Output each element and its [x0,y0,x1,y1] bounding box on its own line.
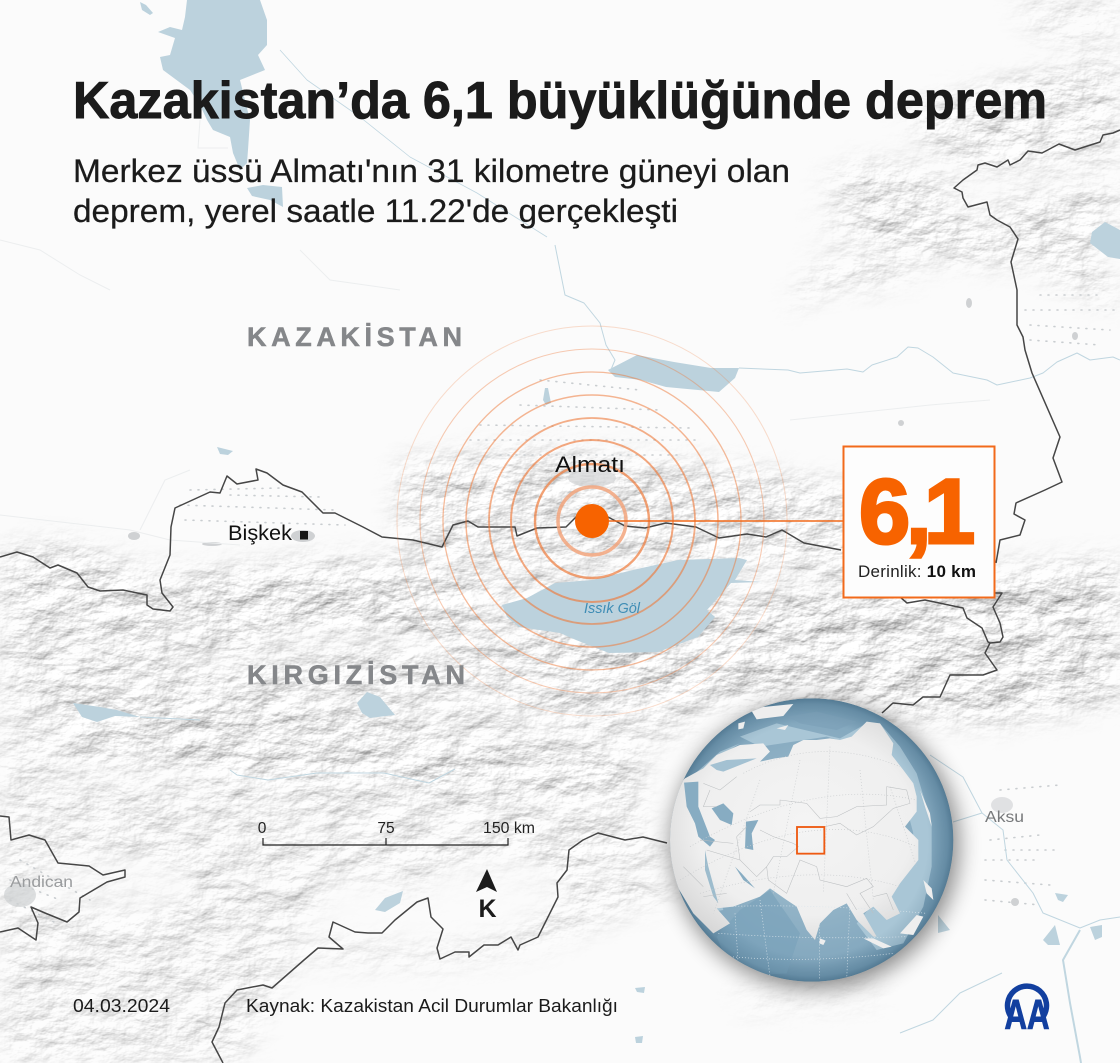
label: Issık Göl: Issık Göl [584,600,641,617]
islands [738,704,933,948]
border: Kazakhstan–China [954,130,1120,563]
border: Fergana [0,816,125,940]
scale bar: 150 km [483,820,535,837]
label: Bişkek: Bişkek [228,522,293,545]
label: Aksu: Aksu [985,809,1024,826]
north arrow [476,869,497,923]
leader line [592,520,843,522]
logo: AA [1004,986,1050,1038]
magnitude value: 6,1 [859,461,975,563]
graticule [680,747,917,913]
seismic rings [397,326,787,716]
label: Almatı: Almatı [555,452,625,477]
arctic shelf [680,723,932,950]
label: Andican: Andican [10,874,73,891]
scale bar [258,820,535,845]
depth: Derinlik: 10 km [858,562,976,581]
locator square [797,827,824,854]
settlement dots [10,295,1115,925]
border: Kazakhstan–Kyrgyzstan [0,469,841,611]
date: 04.03.2024 [73,996,170,1016]
epicentre marker [575,504,609,538]
land [660,722,918,940]
seas [684,758,758,903]
lake: Balkaş north [158,0,267,170]
scale bar: 0 [258,820,267,837]
label: KIRGIZİSTAN: KIRGIZİSTAN [247,660,465,690]
subtitle: Merkez üssü Almatı'nın 31 kilometre güneyi olan [73,153,790,189]
lake: Issık Göl [502,558,762,653]
logo: AA: AA [1004,991,1050,1038]
north arrow: K [478,895,497,923]
border: southern Kyrgyzstan [212,833,667,1063]
scale bar: 75 [377,820,395,837]
city patches [4,298,1078,907]
source: Kaynak: Kazakistan Acil Durumlar Bakanlığı [246,996,618,1016]
subtitle [73,153,790,229]
country borders [683,777,910,913]
locator globe [660,698,953,982]
subtitle: deprem, yerel saatle 11.22'de gerçekleşti [73,193,678,229]
border: China–Kyrgyzstan [882,593,1003,713]
callout: magnitude [844,446,994,598]
title: Kazakistan’da 6,1 büyüklüğünde deprem [73,72,1047,130]
faint roads [0,120,990,545]
label: KAZAKİSTAN: KAZAKİSTAN [247,322,462,352]
globe shadow [671,701,959,989]
